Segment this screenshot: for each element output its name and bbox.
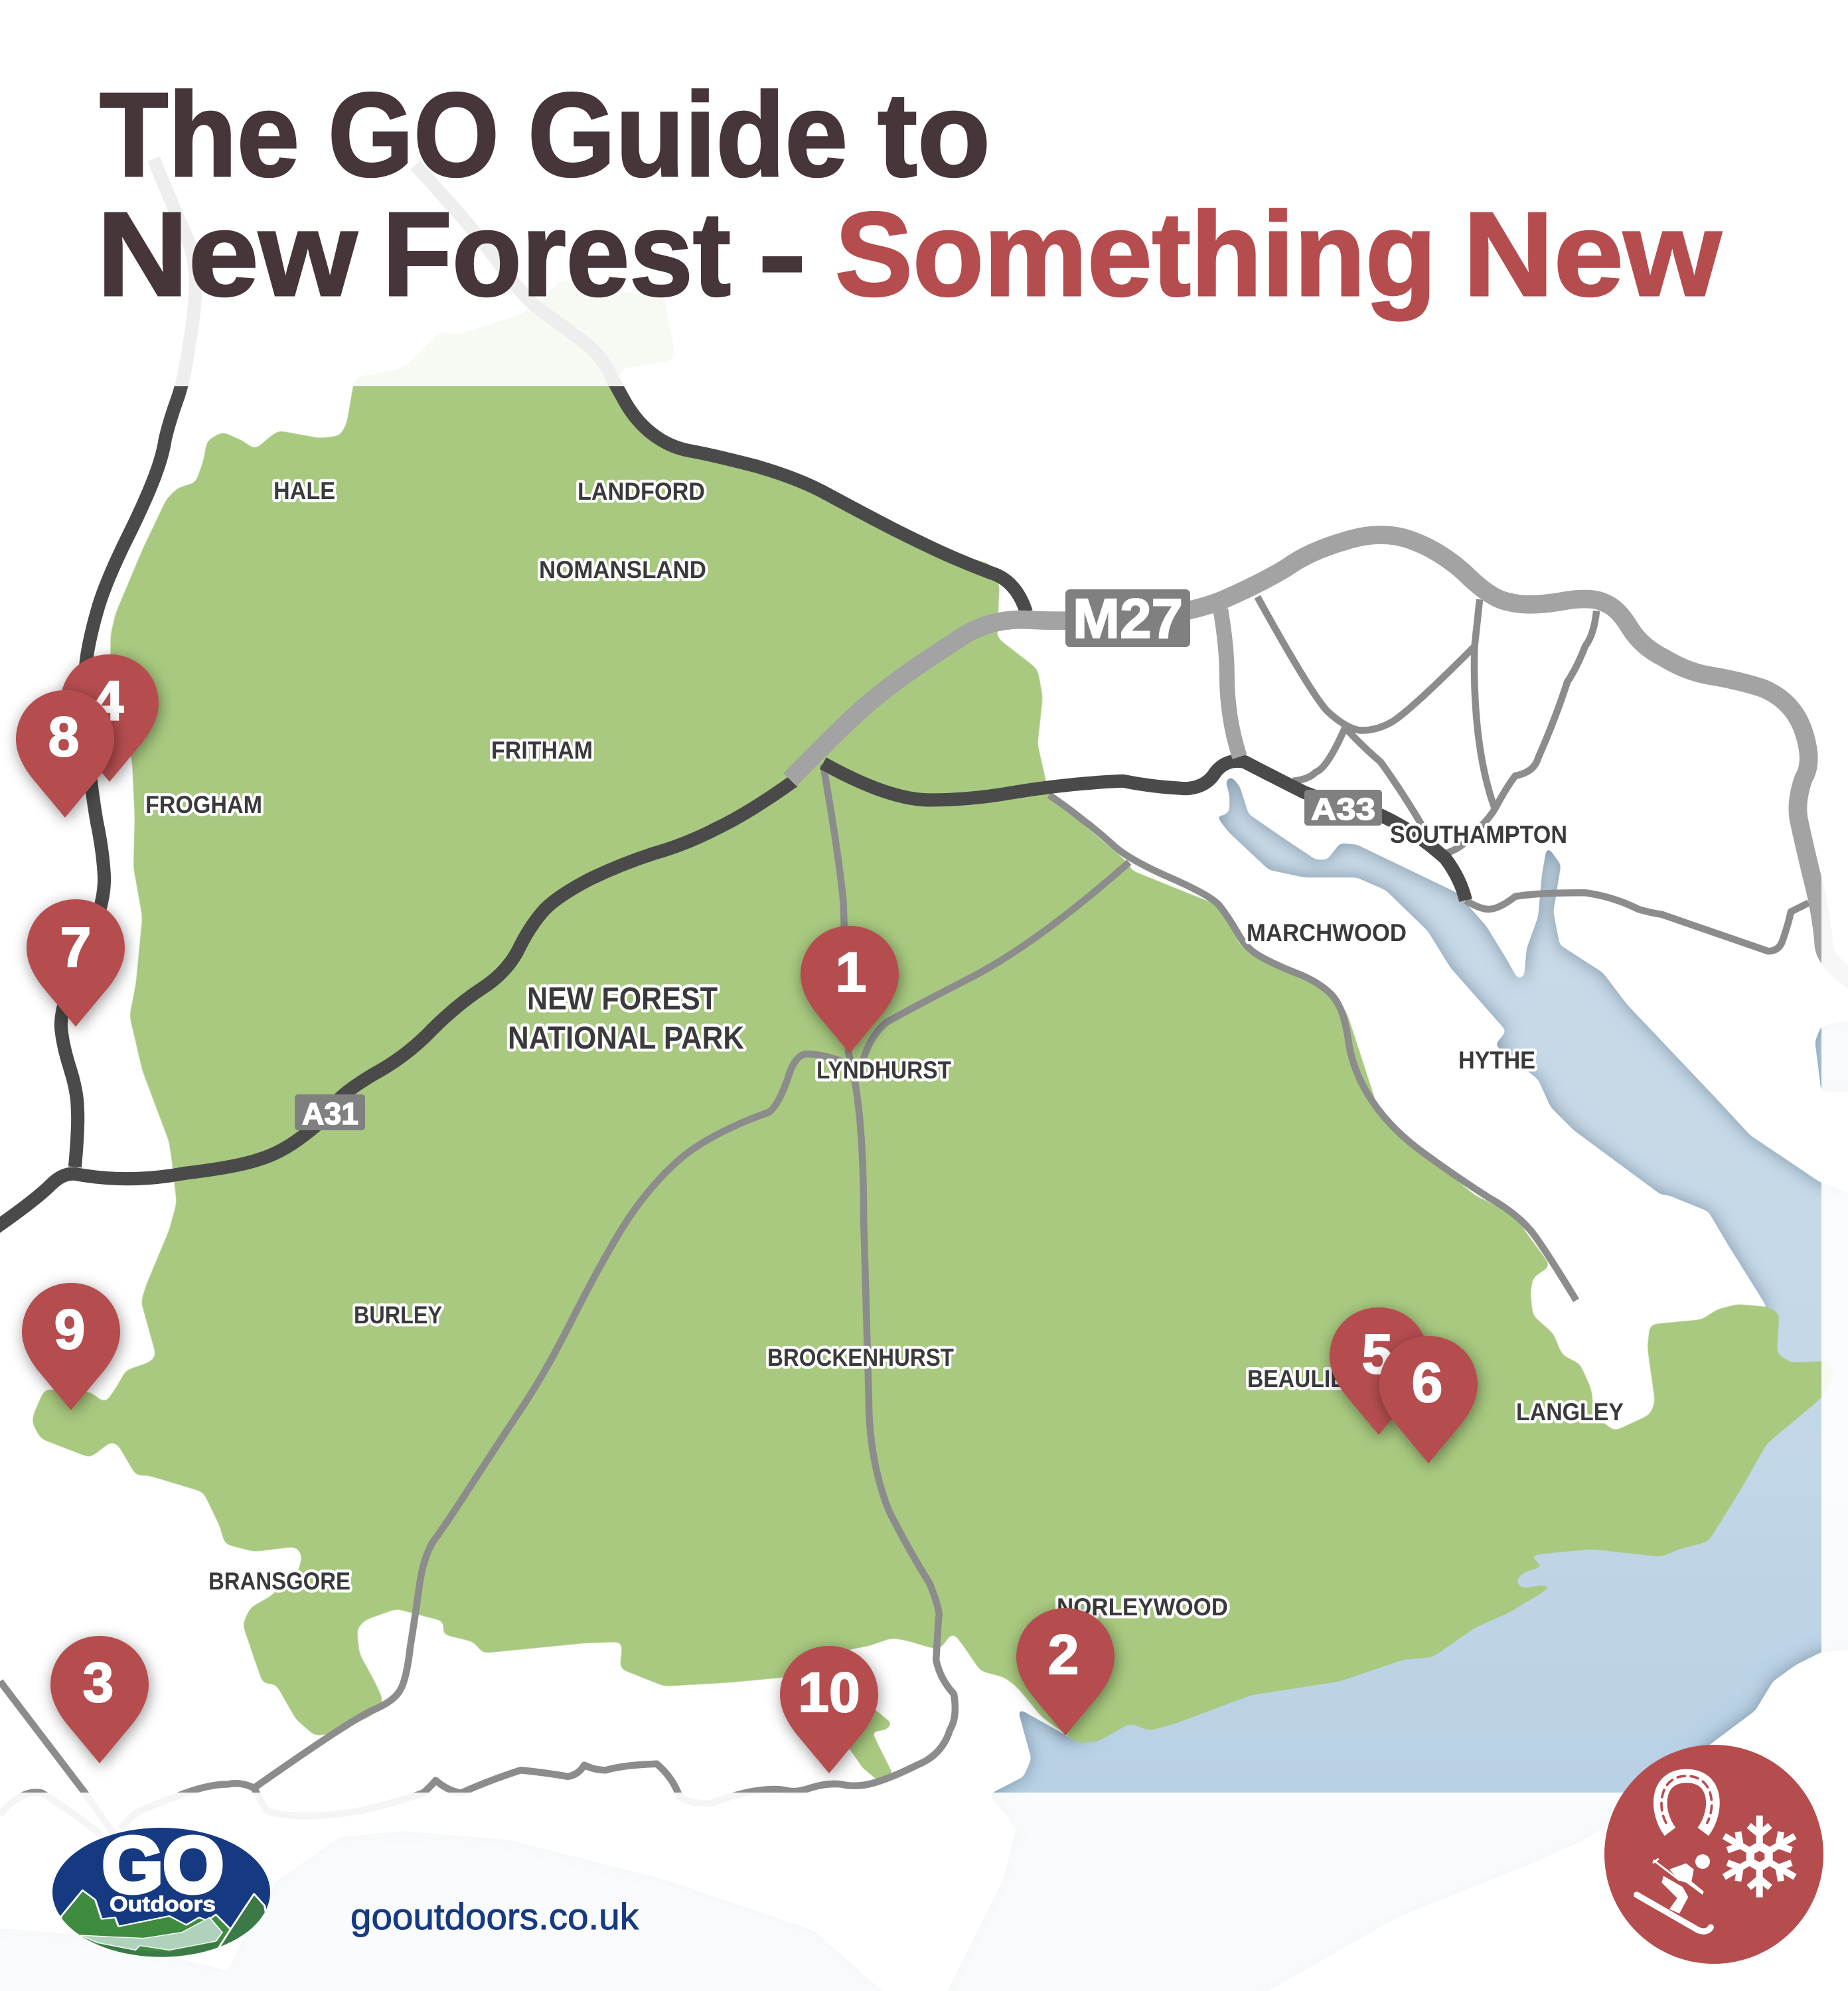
icon: snowflake <box>1719 1816 1800 1897</box>
water: right edge strip <box>1815 1016 1848 1092</box>
green headland under pin 10 <box>838 1689 893 1781</box>
label: Brockenhurst: BROCKENHURST <box>767 1344 954 1371</box>
pin 4: 4 <box>93 670 124 732</box>
road: A31 <box>0 781 794 1229</box>
title line 1: to <box>878 68 990 202</box>
dark A roads <box>0 159 1466 1229</box>
pin 6 <box>1379 1336 1478 1463</box>
road sign: A33 <box>1304 790 1382 826</box>
pin 1 <box>801 926 899 1053</box>
pin 9: 9 <box>54 1298 85 1361</box>
GO Outdoors logo <box>51 1821 271 1959</box>
pin 5: 5 <box>1362 1323 1393 1385</box>
pin 8: 8 <box>48 705 79 768</box>
label: Nomansland: NOMANSLAND <box>539 556 706 583</box>
pin 3: 3 <box>83 1651 114 1714</box>
water: faded sea south-west <box>0 1831 915 1991</box>
title line 1: Guide <box>528 68 848 202</box>
label: Langley: LANGLEY <box>1516 1398 1624 1426</box>
road sign: A31: A31 <box>302 1096 358 1131</box>
pin 9 <box>22 1283 120 1410</box>
title line 1: The <box>100 68 299 202</box>
pin 3 <box>50 1636 149 1763</box>
water: Southampton Water and the Solent <box>933 776 1848 1991</box>
pin 2 <box>1016 1608 1115 1735</box>
title line 1: GO <box>328 68 499 202</box>
label: Beaulieu: BEAULIEU <box>1247 1365 1361 1392</box>
pin 10: 10 <box>798 1661 860 1724</box>
activity badge <box>1604 1745 1823 1964</box>
label: New Forest National Park <box>508 982 744 1056</box>
road sign: M27: M27 <box>1073 587 1183 650</box>
label: Marchwood: MARCHWOOD <box>1247 919 1407 946</box>
place names <box>145 477 1624 1621</box>
label: Hythe: HYTHE <box>1458 1047 1535 1074</box>
label: Hale: HALE <box>273 477 335 504</box>
pin 7: 7 <box>60 916 91 978</box>
road: south-west corner <box>0 1681 114 1835</box>
pin 6: 6 <box>1412 1351 1442 1414</box>
title line 2: New <box>1463 188 1722 321</box>
road: Lyndhurst west <box>254 1054 848 1788</box>
icon: skier <box>1637 1854 1711 1931</box>
label: Lyndhurst: LYNDHURST <box>816 1057 951 1084</box>
pin 10 <box>780 1646 878 1773</box>
label: New Forest National Park: NATIONAL PARK <box>508 1021 744 1056</box>
road: A33 <box>823 761 1466 901</box>
road: coast <box>1049 795 1577 1300</box>
label: Norleywood: NORLEYWOOD <box>1057 1593 1228 1621</box>
title line 2: - <box>758 188 807 321</box>
website url: gooutdoors.co.uk <box>350 1895 639 1937</box>
thin grey local roads <box>0 597 1809 1835</box>
road sign: A33: A33 <box>1311 792 1375 826</box>
M27 motorway <box>790 535 1848 990</box>
pin 1: 1 <box>836 941 866 1003</box>
title line 2: Forest <box>382 188 731 321</box>
title <box>97 68 1722 321</box>
road: western A338 <box>61 159 196 1167</box>
title line 2: New <box>97 188 358 321</box>
label: Landford: LANDFORD <box>578 478 705 505</box>
pin 7 <box>27 899 125 1027</box>
roads: Southampton network <box>1257 597 1474 730</box>
title line 2: Something <box>835 188 1436 321</box>
icon: horseshoe <box>1660 1776 1713 1832</box>
pin 2: 2 <box>1048 1623 1079 1686</box>
title line 1 <box>100 68 990 202</box>
road: north to south through Lyndhurst <box>121 765 955 1828</box>
road: northern A36 <box>416 165 1026 612</box>
label: New Forest National Park: NEW FOREST <box>527 982 718 1017</box>
label: Fritham: FRITHAM <box>491 737 593 764</box>
logo mountains <box>51 1890 271 1959</box>
road: Lyndhurst east <box>860 862 1129 1074</box>
logo wordmark GO: GO <box>102 1821 224 1909</box>
pin 8 <box>16 690 114 818</box>
pin 5 <box>1330 1307 1428 1435</box>
national park land <box>32 279 1834 1743</box>
label: Burley: BURLEY <box>354 1301 442 1329</box>
label: Frogham: FROGHAM <box>145 791 262 818</box>
label: Southampton: SOUTHAMPTON <box>1390 821 1567 848</box>
logo wordmark Outdoors: Outdoors <box>110 1892 216 1916</box>
title line 2 <box>97 188 1722 321</box>
pin 4 <box>60 654 159 782</box>
label: Bransgore: BRANSGORE <box>208 1568 350 1595</box>
